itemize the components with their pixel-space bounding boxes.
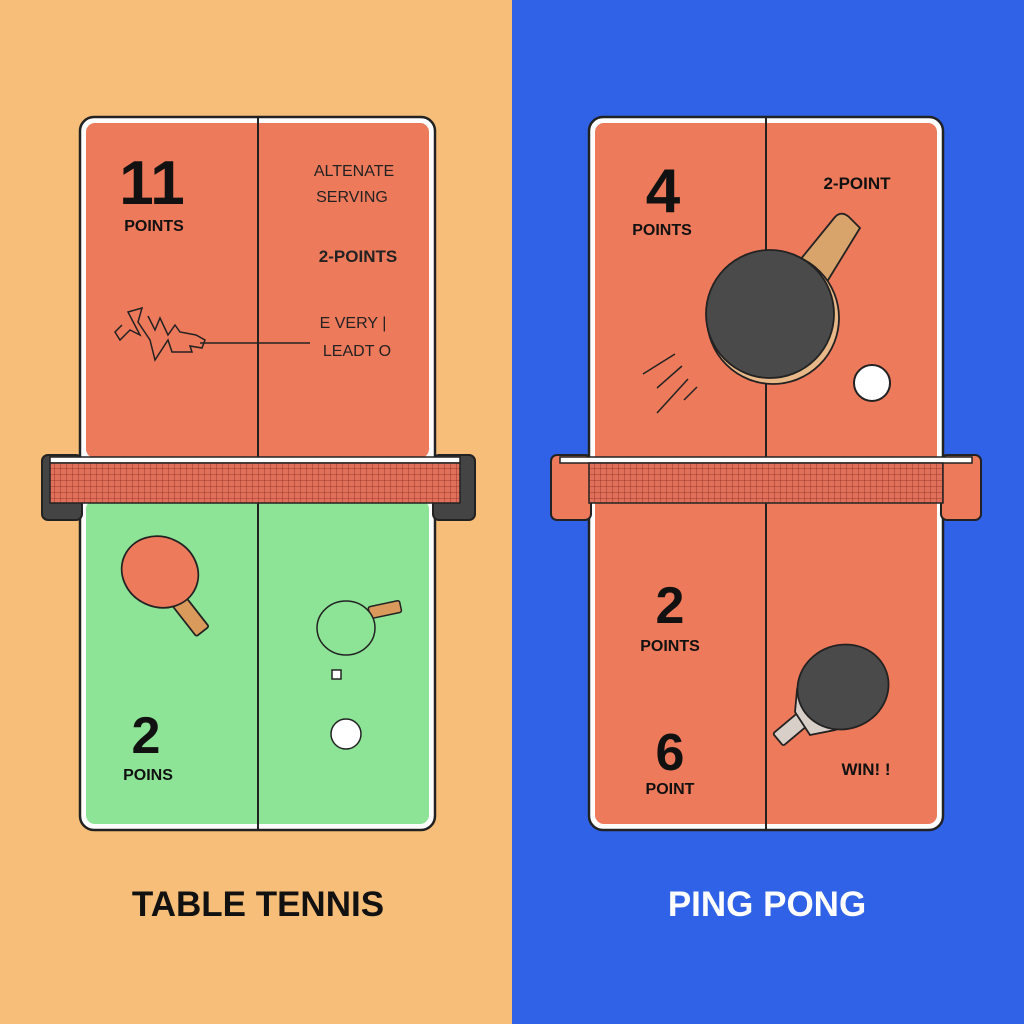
- text block: serving rules: 2-POINTS: [319, 247, 397, 266]
- text: 4 points: [632, 157, 891, 239]
- text: 2 points / 6 point: 2: [656, 577, 684, 635]
- text block: serving rules: E VERY |: [320, 315, 386, 332]
- title: ping pong: PING PONG: [668, 885, 866, 924]
- net: [551, 455, 981, 520]
- green half: [86, 500, 429, 824]
- icon: outline paddle & ball: [317, 600, 402, 749]
- text block: serving rules: [314, 163, 397, 360]
- panel: ping pong: [551, 117, 981, 830]
- text: 2 points: POINS: [123, 767, 173, 784]
- text: 2 points / 6 point: 6: [656, 724, 684, 782]
- text block: serving rules: ALTENATE: [314, 163, 394, 180]
- text: 4 points: 4: [646, 157, 681, 226]
- panel: table tennis: [42, 117, 475, 830]
- icon: black paddle: [706, 214, 860, 384]
- text: 4 points: POINTS: [632, 222, 692, 239]
- text: 4 points: 2-POINT: [823, 174, 891, 193]
- heading numbers: 11: [119, 149, 185, 218]
- text: 2 points / 6 point: [640, 577, 891, 798]
- net: [42, 455, 475, 520]
- text: 2 points / 6 point: POINT: [646, 781, 695, 798]
- text: 2 points: 2: [132, 707, 160, 765]
- text block: serving rules: LEADT O: [323, 343, 391, 360]
- icon: scribble: [115, 308, 310, 360]
- icon: black paddle lower: [773, 632, 901, 746]
- text block: serving rules: SERVING: [316, 189, 388, 206]
- heading numbers: POINTS: [124, 218, 184, 235]
- text: 2 points / 6 point: WIN! !: [841, 760, 891, 779]
- title: table tennis: TABLE TENNIS: [132, 885, 384, 924]
- text: 2 points / 6 point: POINTS: [640, 638, 700, 655]
- icon: motion lines & ball: [643, 354, 890, 413]
- red half: [86, 123, 429, 458]
- text: 2 points: [123, 707, 173, 784]
- icon: red paddle: [110, 524, 210, 636]
